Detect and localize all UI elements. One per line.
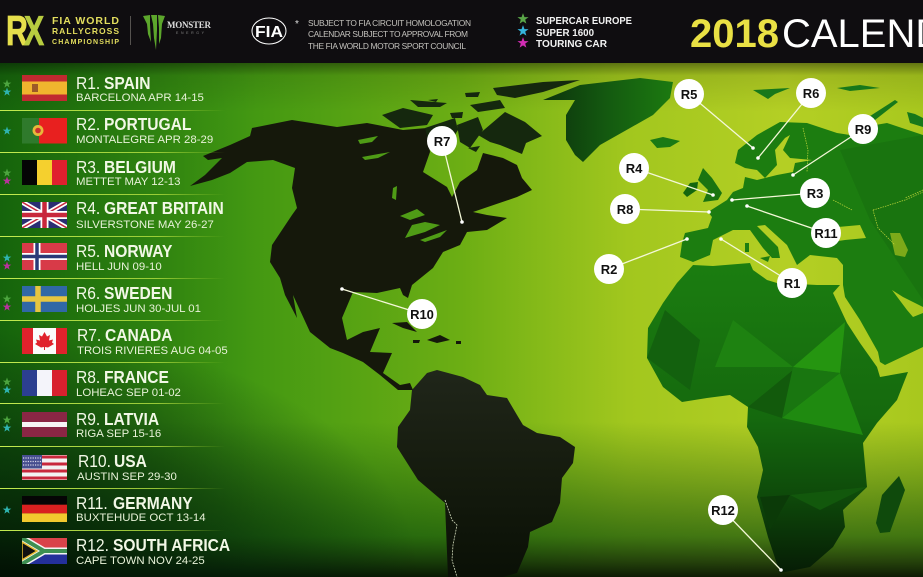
- row: R11 Germany: BUXTEHUDE OCT 13-14: [76, 512, 206, 524]
- row: R7 Canada: R7.: [77, 325, 101, 345]
- flag: Norway: [22, 243, 67, 270]
- row: R9 Latvia: [3, 409, 161, 440]
- row rules: [0, 110, 225, 531]
- row: R8 France: R8.: [76, 367, 100, 387]
- logo: RX: [6, 7, 45, 54]
- legend: series: TOURING CAR: [536, 38, 607, 50]
- row: R8 France: [3, 367, 181, 399]
- flag: Belgium: [22, 160, 67, 185]
- homologation note: [295, 18, 471, 51]
- pin: R12: [708, 495, 783, 572]
- row: R5 Norway: [3, 241, 172, 273]
- border: Chile: [445, 500, 457, 577]
- legend: series: [517, 13, 632, 50]
- logo wordmark: CHAMPIONSHIP: [52, 39, 119, 46]
- logo: FIA: [252, 18, 286, 44]
- world map: [190, 78, 923, 577]
- pin: R8: R8: [617, 202, 633, 217]
- flag: Latvia: [22, 412, 67, 437]
- pin: R2: [594, 237, 689, 284]
- row: R8 France: FRANCE: [104, 367, 169, 387]
- row: R12 South Africa: CAPE TOWN NOV 24-25: [76, 555, 205, 567]
- row: R9 Latvia: LATVIA: [104, 409, 159, 429]
- pin: R5: [674, 79, 755, 150]
- pin: R7: R7: [434, 134, 450, 149]
- landmass: South America: [397, 370, 575, 577]
- flag: Great Britain: [22, 202, 67, 228]
- landmass: Madagascar: [876, 476, 905, 533]
- pin: R9: [791, 114, 878, 177]
- row: R5 Norway: HELL JUN 09-10: [76, 261, 162, 273]
- row: R10 USA: [22, 451, 177, 483]
- panel: round list: [0, 73, 230, 567]
- logo wordmark: FIA WORLD: [52, 15, 119, 27]
- row: R4 Great Britain: R4.: [76, 198, 100, 218]
- row: R6 Sweden: HOLJES JUN 30-JUL 01: [76, 303, 201, 315]
- row: R4 Great Britain: SILVERSTONE MAY 26-27: [76, 219, 214, 231]
- row: R12 South Africa: [22, 538, 230, 564]
- landmass: Eurasia: [680, 122, 923, 365]
- pin: R11: R11: [814, 226, 838, 241]
- flag: Sweden: [22, 286, 67, 312]
- pin: R5: R5: [681, 87, 697, 102]
- pin: R10: R10: [410, 307, 434, 322]
- legend: series: SUPER 1600: [536, 27, 594, 39]
- pin: R9: R9: [855, 122, 871, 137]
- row: R6 Sweden: [3, 283, 201, 315]
- flag: South Africa: [22, 538, 67, 564]
- landmass: North America: [190, 120, 532, 390]
- row: R12 South Africa: R12.: [76, 535, 109, 555]
- landmass: Greenland: [543, 78, 673, 162]
- landmass: Caribbean islands: [392, 322, 461, 344]
- row: R3 Belgium: BELGIUM: [104, 157, 176, 177]
- row: R3 Belgium: R3.: [76, 157, 100, 177]
- Eurasia shading: [840, 135, 923, 300]
- pin: R1: R1: [784, 276, 800, 291]
- flag: Portugal: [22, 118, 67, 144]
- landmass: Africa: [647, 263, 908, 573]
- pin: R1: [719, 237, 807, 298]
- top header bar: [0, 0, 923, 63]
- row: R11 Germany: [3, 493, 206, 524]
- row: R10 USA: AUSTIN SEP 29-30: [77, 471, 177, 483]
- row: R6 Sweden: SWEDEN: [104, 283, 172, 303]
- row: R11 Germany: R11.: [76, 493, 108, 513]
- row: R3 Belgium: METTET MAY 12-13: [76, 176, 180, 188]
- logo: RX: R: [6, 7, 28, 54]
- logo wordmark: RALLYCROSS: [52, 26, 119, 36]
- pin: R4: R4: [626, 161, 643, 176]
- row: R3 Belgium: [3, 157, 180, 188]
- flag: USA: [22, 455, 67, 480]
- row: R2 Portugal: MONTALEGRE APR 28-29: [76, 134, 213, 146]
- logo wordmark: [52, 15, 119, 46]
- pin: R6: R6: [803, 86, 819, 101]
- row: R5 Norway: NORWAY: [104, 241, 172, 261]
- pin: R2: R2: [601, 262, 617, 277]
- row: R9 Latvia: RIGA SEP 15-16: [76, 428, 161, 440]
- homologation note: THE FIA WORLD MOTOR SPORT COUNCIL: [308, 41, 466, 51]
- logo: Monster claw: [143, 15, 165, 50]
- row: R10 USA: R10.: [78, 451, 111, 471]
- row: R1 Spain: SPAIN: [104, 73, 150, 93]
- row: R10 USA: USA: [114, 451, 147, 471]
- landmass: Sardinia and Sicily: [745, 243, 770, 262]
- homologation note: SUBJECT TO FIA CIRCUIT HOMOLOGATION: [308, 18, 471, 28]
- landmass: Ireland: [683, 182, 698, 197]
- row: R2 Portugal: R2.: [76, 114, 100, 134]
- legend: series: SUPERCAR EUROPE: [536, 15, 632, 27]
- flag: France: [22, 370, 67, 396]
- pin: R12: R12: [711, 503, 735, 518]
- row: R7 Canada: CANADA: [105, 325, 173, 345]
- row: R2 Portugal: PORTUGAL: [104, 114, 191, 134]
- logo: Monster wordmark: MONSTER: [167, 20, 212, 30]
- logo: RX: X: [24, 7, 45, 54]
- pin: R3: [730, 178, 830, 208]
- pin: R6: [756, 78, 826, 160]
- row: R1 Spain: R1.: [76, 73, 100, 93]
- homologation note: CALENDAR SUBJECT TO APPROVAL FROM: [308, 29, 468, 39]
- divider: [130, 16, 131, 45]
- landmass: Iceland: [650, 137, 680, 148]
- row: R11 Germany: GERMANY: [113, 493, 193, 513]
- row: R5 Norway: R5.: [76, 241, 100, 261]
- row: R12 South Africa: SOUTH AFRICA: [113, 535, 230, 555]
- row: R2 Portugal: [3, 114, 213, 146]
- flag: Spain: [22, 75, 67, 101]
- row: R8 France: LOHEAC SEP 01-02: [76, 387, 181, 399]
- pin: R10: [340, 287, 437, 329]
- flag: Canada: [22, 328, 67, 354]
- row: R1 Spain: [3, 73, 204, 104]
- landmass: Great Britain: [698, 168, 722, 202]
- logo: FIA: FIA: [255, 24, 283, 41]
- lakes: [358, 136, 447, 242]
- flag: Germany: [22, 496, 67, 522]
- pin: R11: [745, 204, 841, 248]
- homologation note: *: [295, 19, 299, 30]
- border lines: eastern Europe and Asia: [803, 128, 923, 245]
- row: R9 Latvia: R9.: [76, 409, 100, 429]
- landmass: Arctic islands: [753, 85, 923, 128]
- pin: R7: [427, 126, 464, 224]
- map pins: [340, 78, 878, 572]
- pin: R8: [610, 194, 711, 224]
- row: R4 Great Britain: GREAT BRITAIN: [104, 198, 224, 218]
- pin: R4: [619, 153, 715, 197]
- landmass: Canadian Arctic islands: [382, 80, 580, 154]
- row: R6 Sweden: R6.: [76, 283, 100, 303]
- row: R4 Great Britain: [22, 202, 223, 228]
- pin: R3: R3: [807, 186, 823, 201]
- row: R7 Canada: TROIS RIVIERES AUG 04-05: [77, 345, 228, 357]
- row: R1 Spain: BARCELONA APR 14-15: [76, 92, 204, 104]
- logo: Monster wordmark: [167, 20, 212, 35]
- row: R7 Canada: [22, 325, 228, 357]
- logo: Monster wordmark: ENERGY: [176, 31, 205, 35]
